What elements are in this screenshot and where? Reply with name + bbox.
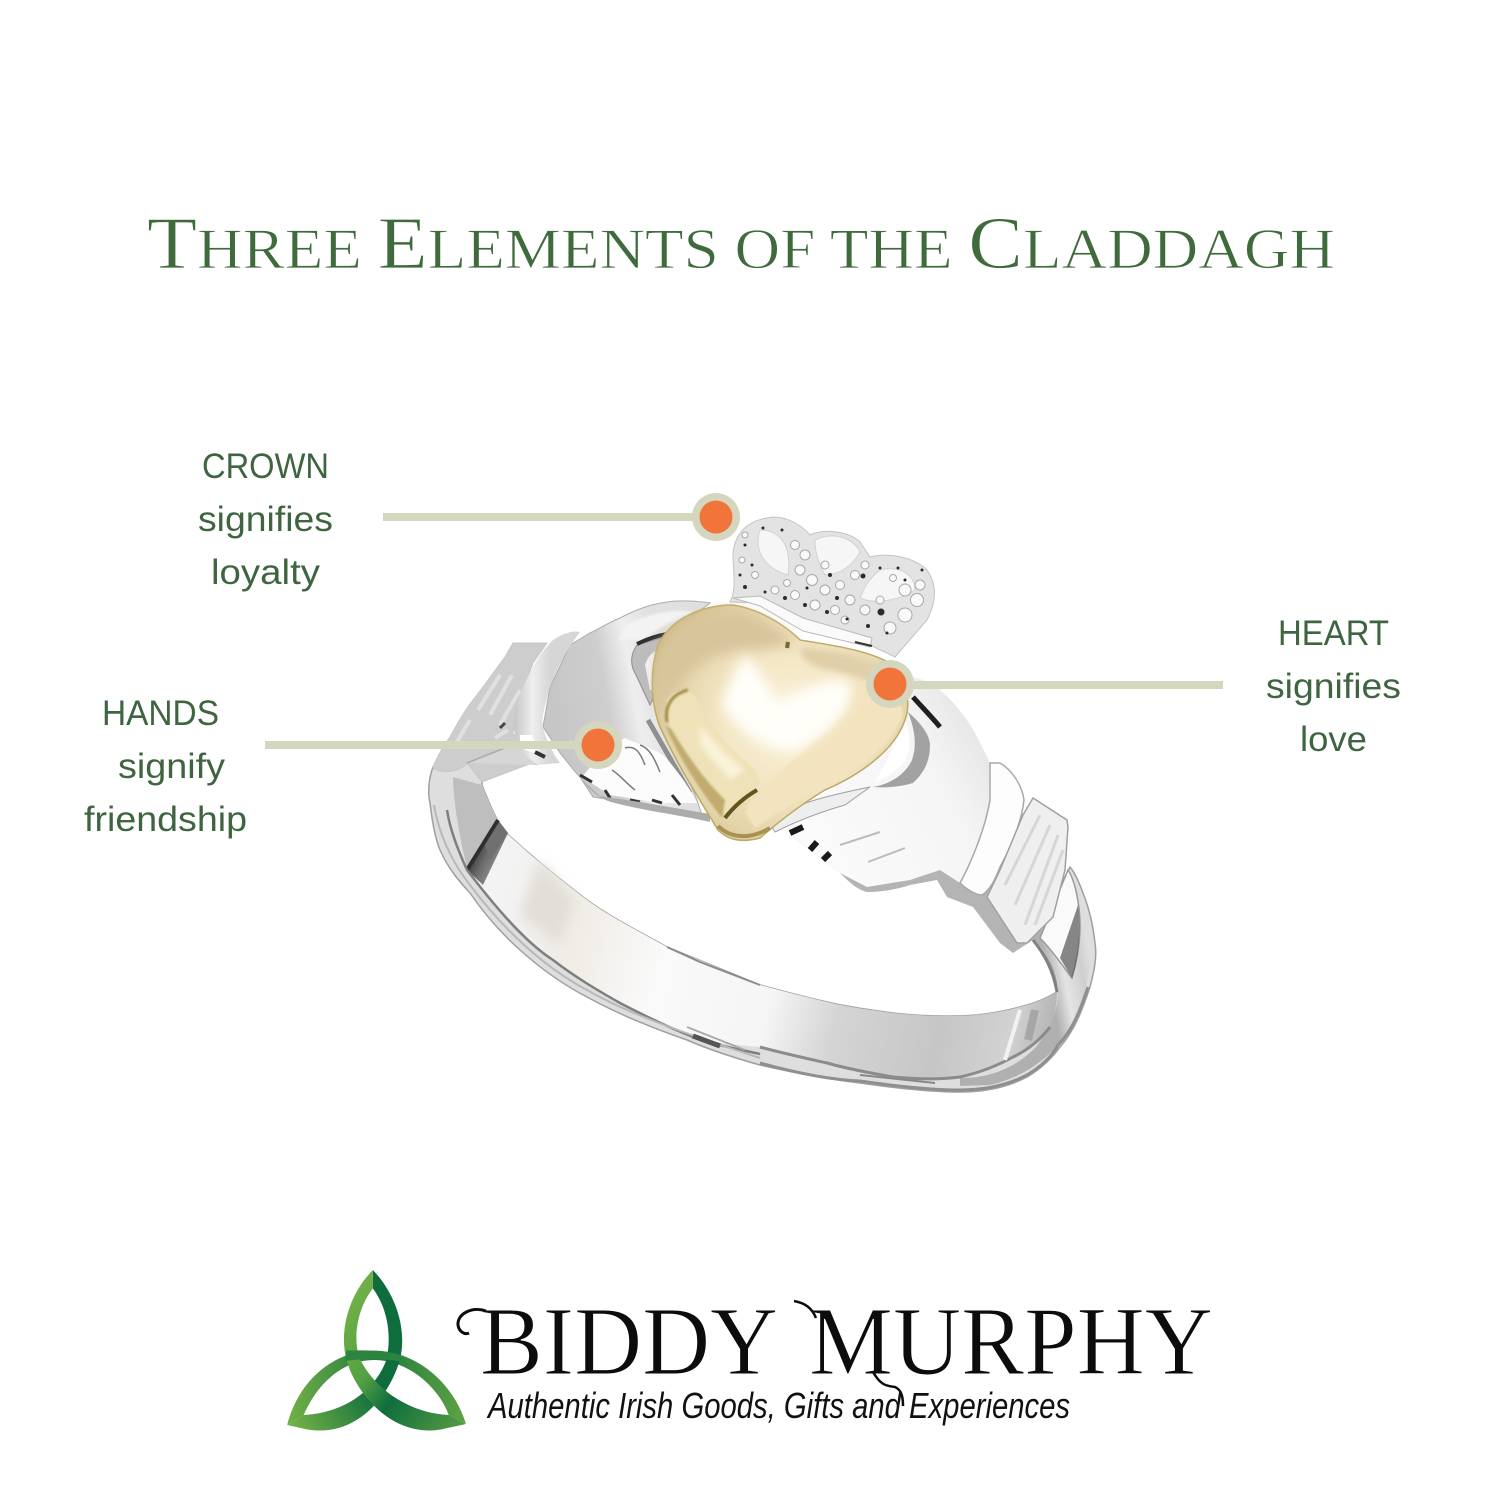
label: hands bbox=[84, 694, 247, 839]
band dark facet bbox=[467, 820, 508, 885]
label: heart bbox=[1266, 614, 1401, 759]
label: crown bbox=[198, 447, 333, 592]
label: crown: signifies bbox=[198, 500, 333, 539]
right hand bbox=[768, 677, 1068, 953]
right hand body bbox=[770, 677, 1023, 895]
thumb hole bbox=[632, 636, 667, 705]
callout line: heart bbox=[908, 681, 1223, 689]
crown specks bbox=[738, 526, 924, 634]
band outer right highlight bbox=[960, 890, 1090, 1086]
label: heart: signifies bbox=[1266, 667, 1401, 706]
right hand rim bbox=[793, 780, 1040, 953]
crown beading bbox=[739, 532, 925, 634]
band rim lines bbox=[447, 810, 760, 1054]
band right shoulder facet bbox=[1040, 870, 1080, 978]
callout dot: heart bbox=[866, 660, 914, 708]
left wrist fan bbox=[433, 643, 547, 782]
callout dot: hands bbox=[574, 721, 622, 769]
left hand bbox=[433, 601, 710, 822]
logo: brand name: MURPHY bbox=[809, 1288, 1213, 1395]
callout line: crown bbox=[383, 513, 698, 521]
left fingers bbox=[582, 738, 697, 803]
callout dot: crown bbox=[692, 493, 740, 541]
callout: crown bbox=[383, 493, 740, 541]
band left inner gray section bbox=[453, 777, 498, 868]
heart highlight bbox=[722, 655, 852, 752]
logo: trinity knot icon bbox=[287, 1270, 466, 1431]
right palm gap bbox=[875, 720, 910, 782]
right fingers bbox=[780, 793, 853, 823]
band soft reflection bbox=[520, 860, 575, 945]
logo: tagline: Authentic Irish Goods, Gifts and Experiences bbox=[486, 1385, 1070, 1426]
right cuff bbox=[960, 763, 1024, 895]
label: hands: HANDS bbox=[102, 694, 219, 733]
label: hands: signify bbox=[118, 747, 226, 786]
label: crown: loyalty bbox=[211, 553, 321, 592]
label: hands: friendship bbox=[84, 800, 247, 839]
band inner surface bbox=[453, 777, 1057, 1079]
logo: brand name: BIDDY bbox=[480, 1288, 778, 1395]
gold heart bbox=[652, 605, 908, 840]
label: heart: HEART bbox=[1278, 614, 1389, 653]
crown bbox=[730, 517, 934, 657]
heart lower facet bbox=[666, 689, 760, 815]
heart right cheek bbox=[745, 680, 903, 828]
callout line: hands bbox=[265, 741, 583, 749]
callout: hands bbox=[265, 721, 622, 769]
logo: brand name bbox=[458, 1288, 1213, 1406]
ring band bbox=[429, 751, 1096, 1092]
label: heart: love bbox=[1300, 720, 1367, 759]
crown lobes bbox=[758, 530, 915, 601]
heart crease bbox=[725, 790, 757, 818]
callout: heart bbox=[866, 660, 1223, 708]
title: THREE ELEMENTS OF THE CLADDAGH bbox=[147, 203, 1335, 285]
left cuff bbox=[513, 631, 580, 765]
label: crown: CROWN bbox=[202, 447, 329, 486]
ring illustration bbox=[429, 517, 1096, 1092]
right wrist fan bbox=[987, 798, 1068, 943]
heart shading bbox=[656, 610, 795, 715]
palm bbox=[543, 601, 710, 818]
